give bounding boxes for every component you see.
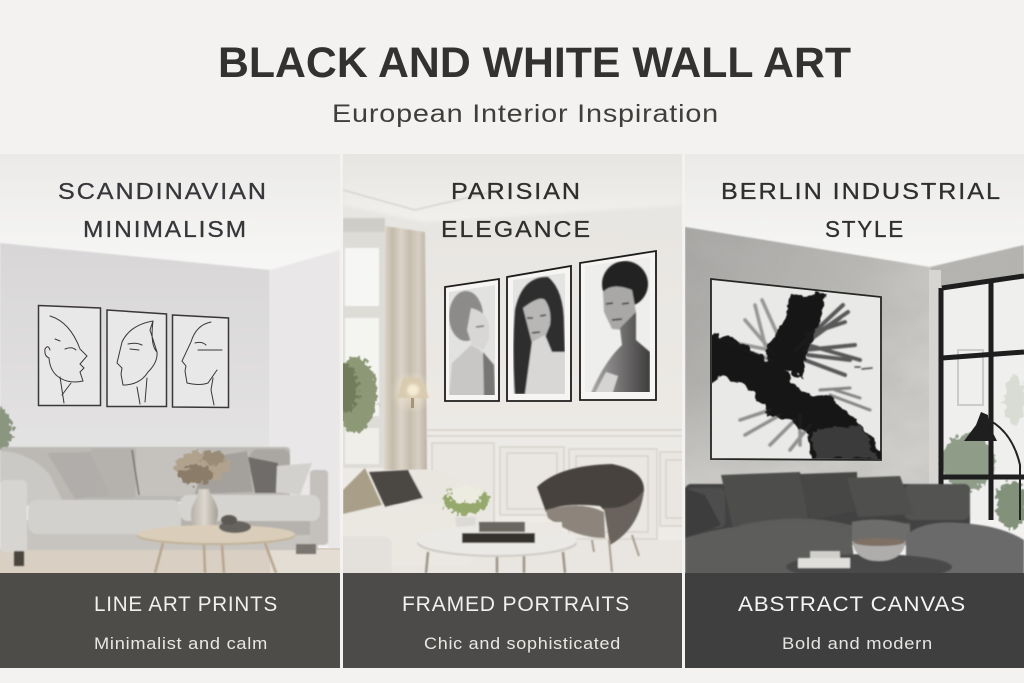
outdoor plants (941, 375, 1024, 529)
subtitle: European Interior Inspiration (332, 100, 719, 128)
panel heading (59, 182, 264, 238)
neck and eye lines (128, 343, 147, 404)
coffee table, bowl and books (786, 538, 952, 580)
plant (335, 357, 377, 433)
portrait left (449, 285, 496, 397)
panel heading (721, 178, 1002, 242)
brush strokes (708, 293, 885, 464)
title: BLACK AND WHITE WALL ART (218, 39, 851, 87)
coffee table and books (417, 522, 577, 573)
sofa (685, 472, 1024, 580)
dried flowers in vase (175, 451, 229, 532)
coffee table (137, 515, 295, 573)
caption description: Bold and modern (782, 634, 933, 653)
wall art: three line art prints (38, 306, 228, 408)
window (343, 218, 385, 468)
room: ceiling and walls (0, 243, 340, 573)
sofa (343, 468, 450, 540)
sofa (0, 447, 328, 566)
line drawing: face left (45, 316, 87, 382)
window with black frame (941, 276, 1024, 529)
caption title: FRAMED PORTRAITS (402, 593, 630, 616)
caption band (685, 573, 1024, 668)
curtain (384, 226, 427, 470)
panel heading: STYLE (825, 216, 905, 242)
caption description: Minimalist and calm (94, 634, 268, 653)
portrait centre (513, 272, 566, 396)
panel: Berlin industrial style (685, 154, 1024, 668)
portrait right (590, 260, 650, 392)
armchair (537, 464, 644, 572)
wainscot panelling (426, 430, 690, 539)
wall art: three framed portraits (445, 251, 656, 401)
caption band (343, 573, 682, 668)
floor lamp (964, 412, 1020, 520)
caption title: ABSTRACT CANVAS (738, 593, 966, 616)
table lamp (396, 376, 430, 408)
room: ceiling and walls (343, 154, 682, 574)
line drawing: face right (182, 322, 217, 384)
caption description: Chic and sophisticated (424, 634, 621, 653)
panel: Parisian elegance (335, 154, 690, 668)
caption title: LINE ART PRINTS (94, 593, 278, 616)
caption band (0, 573, 340, 668)
neck and eye lines (195, 342, 222, 405)
wall art: abstract canvas (708, 279, 885, 464)
panel: Scandinavian minimalism (0, 154, 340, 668)
panel heading (442, 182, 590, 238)
line drawing: face centre (117, 321, 157, 385)
room: ceiling and walls (685, 226, 1024, 490)
bouquet (443, 485, 489, 532)
panel heading: MINIMALISM (83, 216, 248, 242)
panel heading: SCANDINAVIAN (58, 178, 268, 204)
plant (0, 410, 13, 450)
panel heading: ELEGANCE (441, 216, 592, 242)
neck and eye lines (55, 339, 76, 403)
panel heading: PARISIAN (451, 178, 582, 204)
frames (445, 251, 656, 401)
panel heading: BERLIN INDUSTRIAL (721, 178, 1002, 204)
